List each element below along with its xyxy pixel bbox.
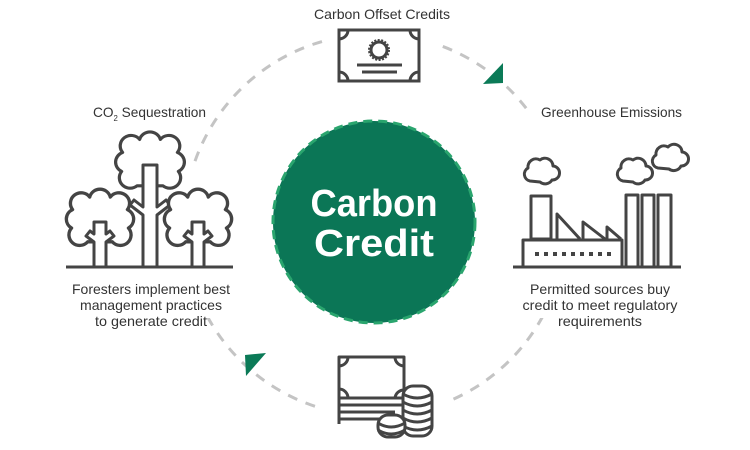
arrow: top right bbox=[483, 63, 503, 84]
text block: foresters: to generate credit bbox=[95, 313, 207, 329]
icon: factory bbox=[513, 144, 689, 267]
heading: CO2 Sequestration: 2 bbox=[114, 114, 118, 123]
center title: Carbon bbox=[310, 183, 438, 225]
heading: Carbon Offset Credits: Carbon Offset Credits bbox=[314, 6, 450, 22]
center circle bbox=[273, 121, 475, 323]
center circle: Credit bbox=[314, 223, 434, 265]
arrow: bottom left bbox=[245, 353, 266, 376]
text block: permitted sources: requirements bbox=[558, 313, 642, 329]
dashed cycle ring bbox=[140, 18, 610, 445]
heading: Greenhouse Emissions: Greenhouse Emissions bbox=[541, 104, 682, 120]
heading: CO2 Sequestration: Sequestration bbox=[118, 104, 206, 120]
text block: foresters bbox=[72, 281, 230, 329]
text block: foresters: management practices bbox=[80, 297, 222, 313]
icon: money and coins bbox=[339, 357, 432, 437]
icon: trees bbox=[66, 132, 233, 267]
text block: foresters: Foresters implement best bbox=[72, 281, 230, 297]
icon: certificate bbox=[339, 30, 419, 81]
text block: permitted sources: Permitted sources buy bbox=[530, 281, 670, 297]
text block: permitted sources bbox=[522, 281, 678, 329]
text block: permitted sources: credit to meet regulatory bbox=[522, 297, 678, 313]
heading: CO2 Sequestration: CO bbox=[93, 104, 114, 120]
